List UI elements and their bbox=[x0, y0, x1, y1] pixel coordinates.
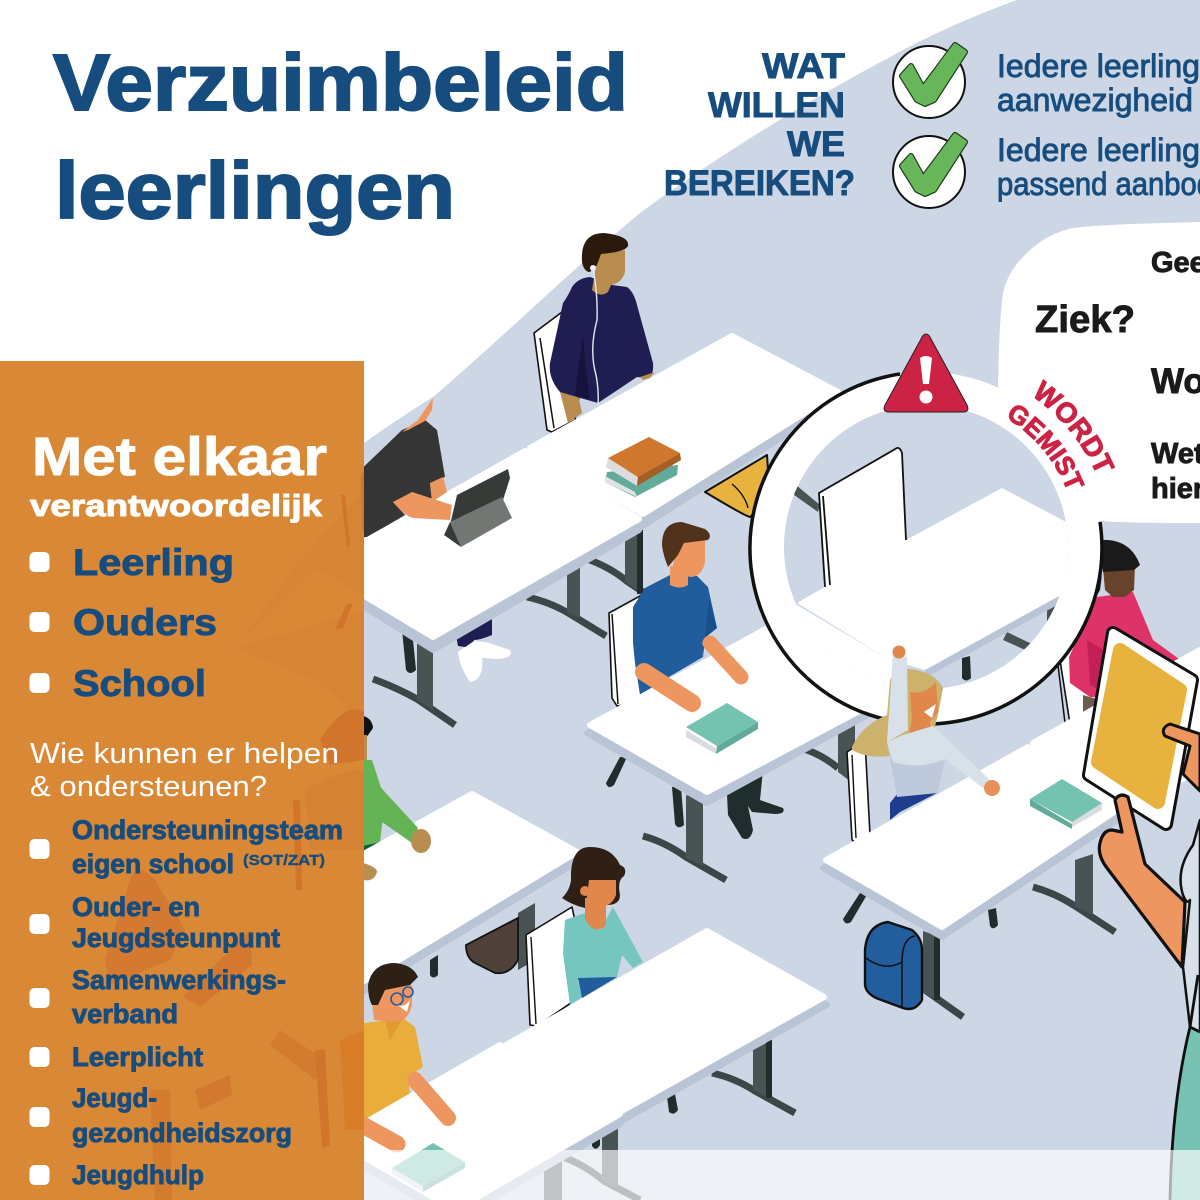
middle desk bbox=[587, 624, 895, 803]
list: support organisations: Ondersteuningsteam bbox=[72, 815, 343, 845]
brown bag under desk bbox=[466, 918, 518, 973]
list: support organisations: Jeugdsteunpunt bbox=[72, 923, 280, 953]
student in blue shirt on chair bbox=[609, 522, 717, 706]
student with grey shirt bbox=[364, 398, 445, 537]
teal book on desk bbox=[686, 703, 758, 754]
curved label: wordt gemist: WORDT bbox=[1034, 379, 1116, 471]
student with raised hand bbox=[847, 646, 945, 842]
teacher left hand bbox=[1099, 795, 1185, 967]
speech bubble texts: Ziek? bbox=[1035, 299, 1135, 341]
hand-held tablet bbox=[1089, 633, 1192, 824]
list: support organisations: (SOT/ZAT) bbox=[243, 852, 325, 869]
goal texts bbox=[997, 48, 1200, 202]
front right desks bbox=[823, 650, 1200, 937]
legs of right desk bbox=[843, 854, 1115, 1017]
list: support organisations: Leerplicht bbox=[72, 1042, 203, 1072]
list: support organisations: Jeugdhulp bbox=[72, 1160, 204, 1190]
goal texts: Iedere leerling bbox=[997, 48, 1200, 84]
list: responsible parties: Ouders bbox=[73, 602, 217, 643]
curved label: wordt gemist: GEMIST bbox=[1008, 405, 1085, 488]
question: wat willen we bereiken: WAT bbox=[762, 47, 845, 86]
list: support organisations: verband bbox=[72, 999, 178, 1029]
green shirt student arms bbox=[350, 778, 431, 880]
icon: check mark 1 bbox=[893, 45, 965, 118]
list: responsible parties: School bbox=[73, 663, 206, 704]
teacher right hand bbox=[1163, 724, 1200, 791]
empty seat seen through ring bbox=[784, 411, 1068, 688]
yellow bag under desk bbox=[705, 455, 770, 517]
legs of back desks bbox=[373, 530, 646, 725]
question text: Wie kunnen er helpen bbox=[30, 738, 339, 770]
back row desks bbox=[318, 336, 840, 650]
student in yellow shirt with glasses bbox=[345, 963, 423, 1125]
orange panel bbox=[0, 361, 364, 1200]
faded classroom shapes behind panel bbox=[105, 470, 364, 1200]
magnifier ring with empty chair bbox=[750, 372, 1102, 724]
panel subheading: verantwoordelijk bbox=[30, 488, 323, 523]
title: Verzuimbeleid bbox=[53, 38, 628, 127]
icon: check mark 2 bbox=[893, 135, 965, 208]
yellow shirt student arms bbox=[350, 1080, 448, 1144]
dark trousers and shoes bbox=[727, 770, 784, 839]
question: wat willen we bereiken: WILLEN bbox=[708, 86, 845, 125]
panel heading: Met elkaar bbox=[32, 427, 327, 487]
tablet on desk bbox=[444, 469, 512, 547]
front lower desks bbox=[335, 931, 827, 1200]
list: responsible parties bbox=[30, 542, 234, 704]
legs of middle desk bbox=[606, 719, 855, 880]
green shirt student body bbox=[345, 715, 385, 860]
list: responsible parties: Leerling bbox=[73, 542, 234, 583]
title bbox=[53, 38, 628, 235]
title: leerlingen bbox=[55, 146, 455, 235]
list: support organisations: Jeugd- bbox=[72, 1083, 157, 1113]
question: wat willen we bereiken: WE bbox=[787, 125, 845, 164]
teal book on front desk bbox=[392, 1143, 465, 1192]
student in teal top bbox=[526, 847, 643, 1026]
grey shirt student arm bbox=[393, 477, 452, 520]
question: wat willen we bereiken bbox=[664, 47, 855, 203]
teacher body bbox=[1170, 820, 1200, 1200]
blue backpack bbox=[865, 922, 922, 1009]
list: support organisations: eigen school bbox=[72, 849, 234, 879]
legs of lower desks bbox=[430, 903, 795, 1200]
speech bubble shape bbox=[998, 222, 1200, 523]
student in pink sweater bbox=[1058, 540, 1200, 725]
speech bubble texts bbox=[1035, 247, 1200, 505]
list: support organisations: gezondheidszorg bbox=[72, 1118, 292, 1148]
stack of books bbox=[605, 437, 681, 497]
blonde student arm bbox=[933, 726, 1000, 796]
list: support organisations: Samenwerkings- bbox=[72, 965, 286, 995]
goal texts: Iedere leerling bbox=[997, 132, 1200, 168]
translucent bottom band bbox=[0, 1150, 1200, 1200]
upper left desk bbox=[190, 794, 577, 1030]
list: support organisations bbox=[30, 815, 343, 1190]
question: wat willen we bereiken: BEREIKEN? bbox=[664, 164, 855, 203]
warning triangle icon bbox=[884, 334, 968, 412]
blue shirt student arms bbox=[644, 643, 741, 703]
list: support organisations: Ouder- en bbox=[72, 892, 200, 922]
student with hoodie and earphones bbox=[534, 233, 655, 432]
goal texts: aanwezigheid bbox=[997, 82, 1193, 118]
teal book on right desk bbox=[1030, 779, 1102, 829]
question text: & ondersteunen? bbox=[30, 771, 267, 803]
question text bbox=[30, 738, 339, 803]
teacher holding tablet bbox=[1089, 633, 1200, 1200]
student legs and shoes under desk bbox=[455, 615, 511, 682]
